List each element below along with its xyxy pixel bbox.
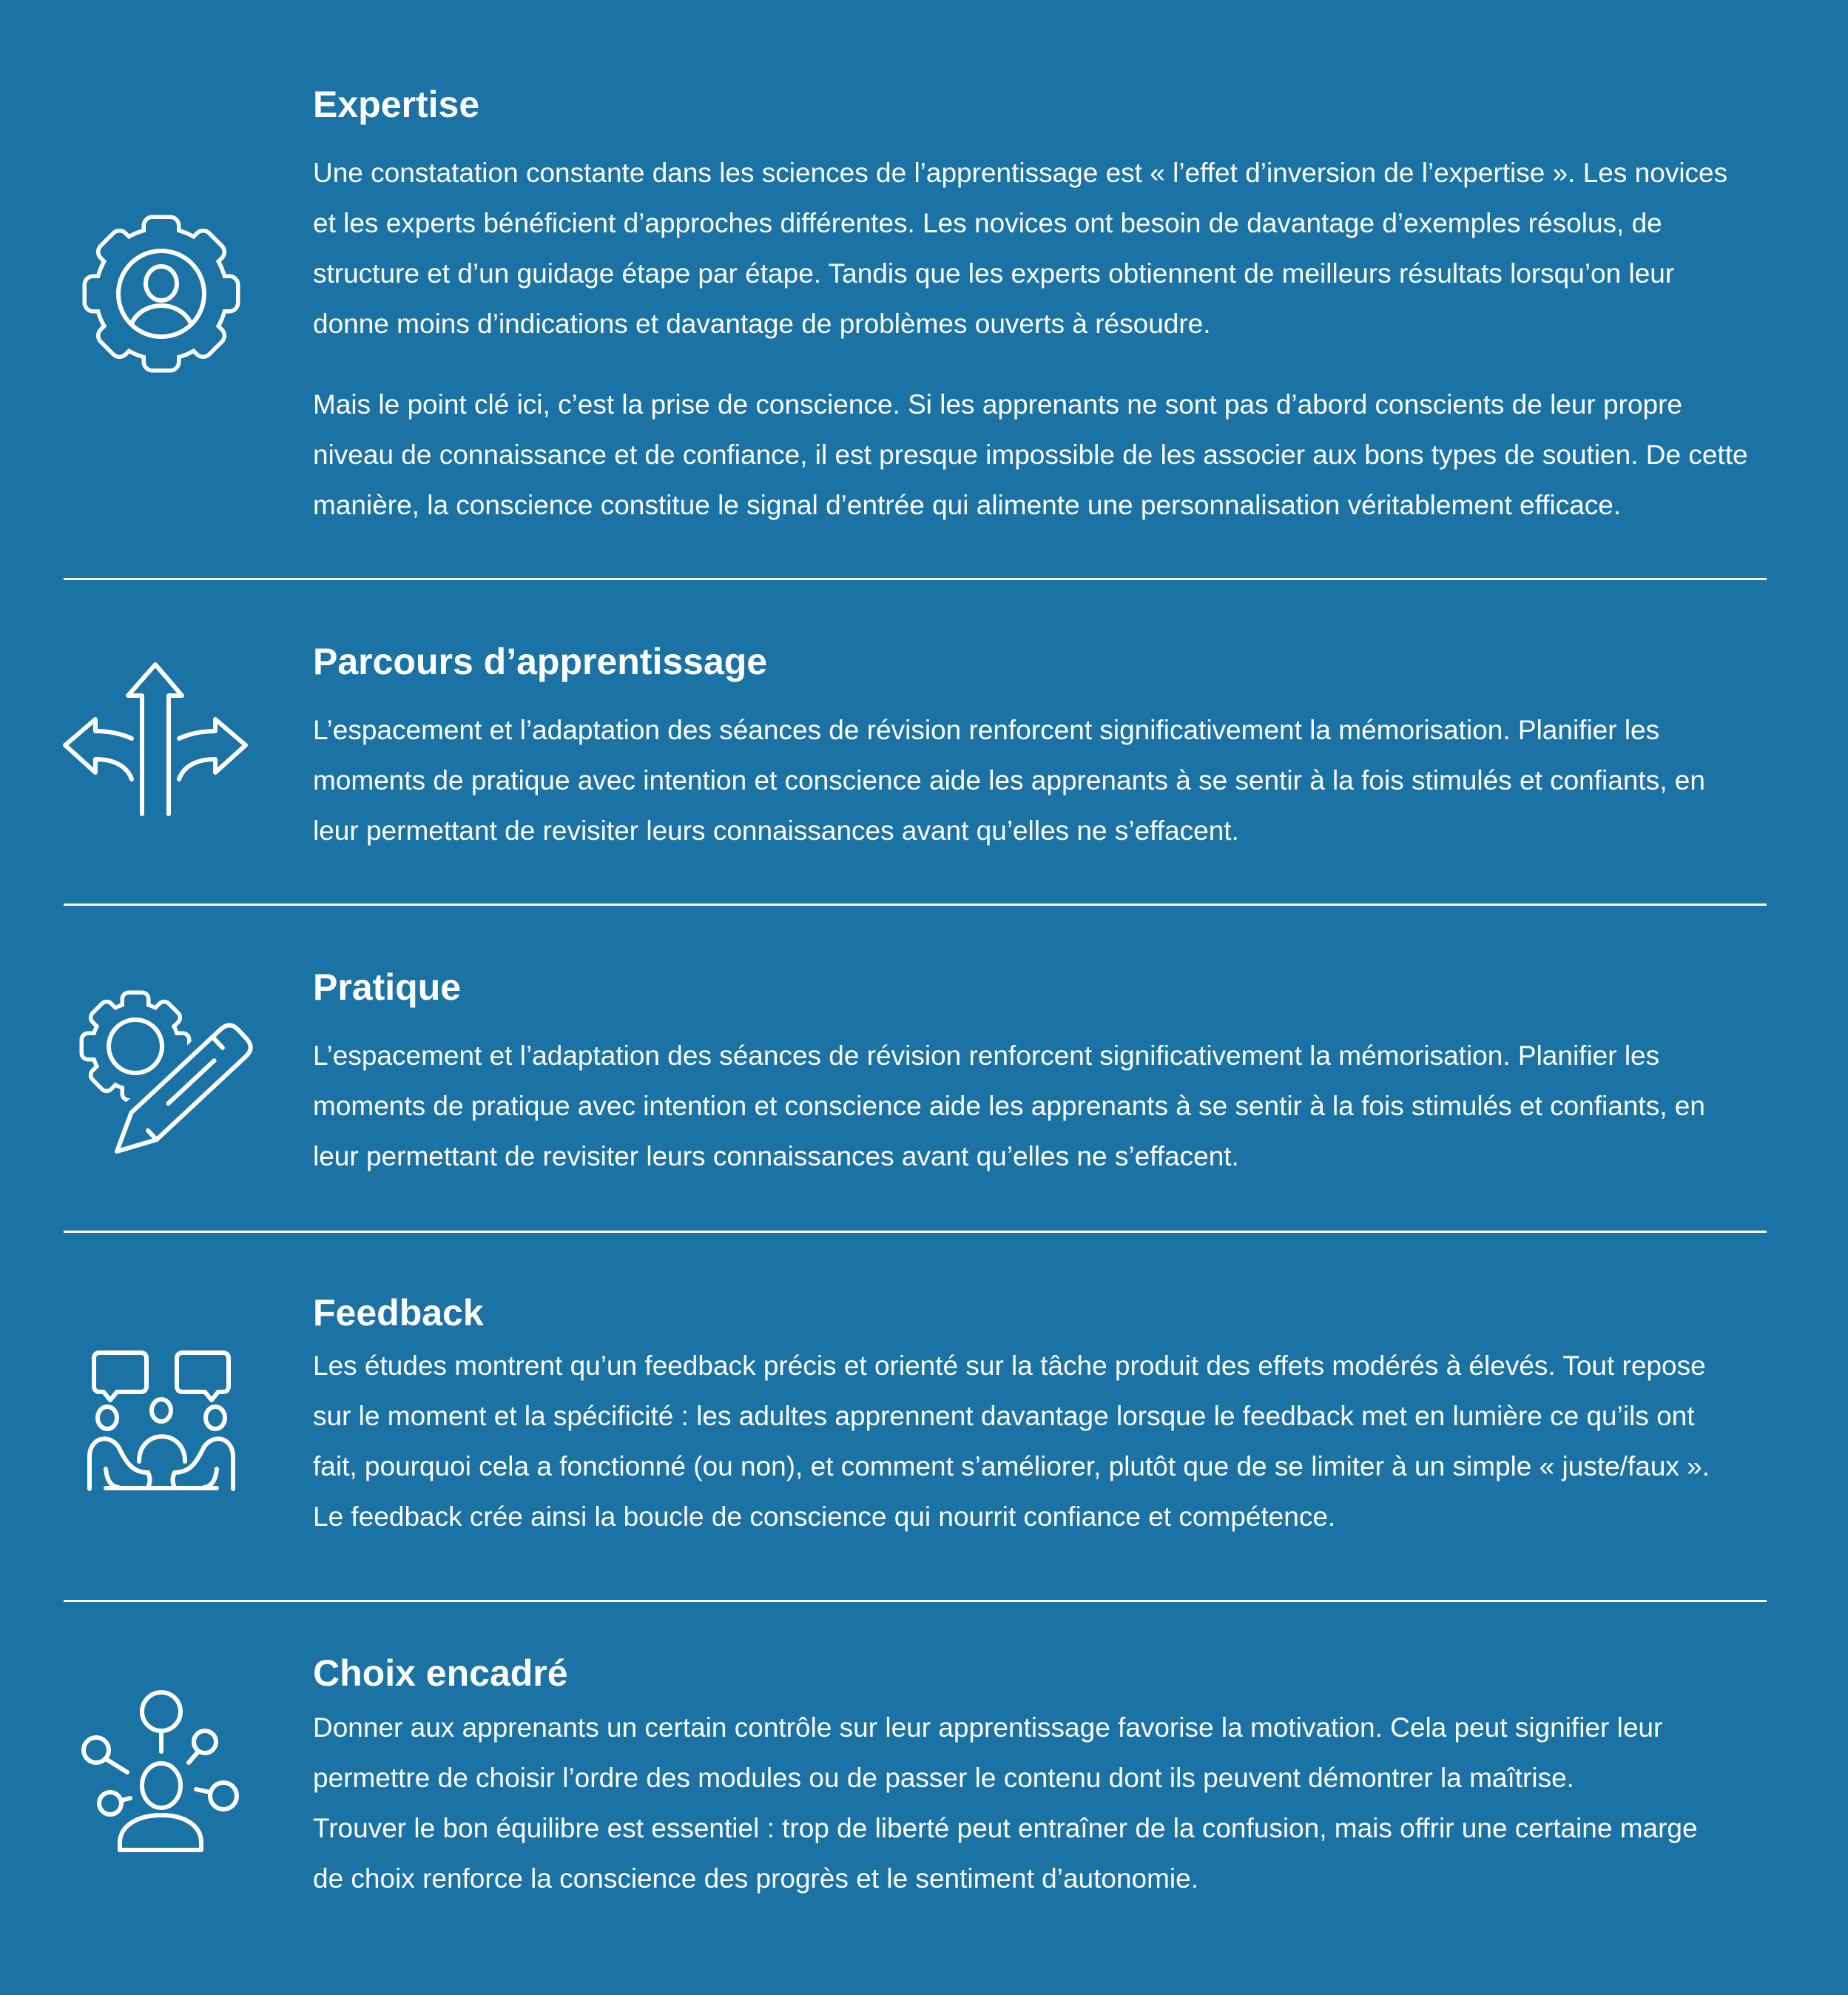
text: Expertise body: structure et d’un guidage étape par étape. Tandis que les experts obtiennent de meilleurs résultats lorsqu’on leur	[313, 258, 1674, 289]
text: Feedback body: Le feedback crée ainsi la boucle de conscience qui nourrit confiance et compétence.	[313, 1501, 1335, 1532]
title: Pratique: Pratique	[313, 966, 461, 1008]
text: Choix body: Trouver le bon équilibre est essentiel : trop de liberté peut entraîner de la confusion, mais offrir une certaine marge	[313, 1813, 1698, 1843]
text: Choix body: permettre de choisir l’ordre des modules ou de passer le contenu dont ils peuvent démontrer la maîtrise.	[313, 1763, 1574, 1793]
text: Pratique body	[313, 1040, 1705, 1171]
text: Parcours body: L’espacement et l’adaptation des séances de révision renforcent significativement la mémorisation. Planifier les	[313, 715, 1659, 745]
text: Expertise body: donne moins d’indications et davantage de problèmes ouverts à résoudre.	[313, 309, 1211, 339]
text: Parcours body: leur permettant de revisiter leurs connaissances avant qu’elles ne s’effacent.	[313, 815, 1239, 846]
title: Choix encadré: Choix encadré	[313, 1652, 568, 1694]
icon: gear with person	[87, 219, 236, 369]
text: Expertise body: et les experts bénéficient d’approches différentes. Les novices ont besoin de davantage d’exemples résolus, de	[313, 208, 1662, 238]
title: Feedback: Feedback	[313, 1292, 484, 1333]
text: Feedback body: fait, pourquoi cela a fonctionné (ou non), et comment s’améliorer, plutôt que de se limiter à un simple « juste/faux ».	[313, 1451, 1710, 1481]
title: Parcours d'apprentissage: Parcours d’apprentissage	[313, 641, 767, 682]
text: Expertise body: Mais le point clé ici, c’est la prise de conscience. Si les apprenants ne sont pas d’abord conscients de leur propre	[313, 389, 1682, 420]
text: Choix body: de choix renforce la conscience des progrès et le sentiment d’autonomie.	[313, 1863, 1198, 1894]
icon: feedback group	[90, 1353, 233, 1489]
text: Choix body	[313, 1712, 1698, 1894]
text: Pratique body: moments de pratique avec intention et conscience aide les apprenants à se sentir à la fois stimulés et confiants, en	[313, 1091, 1705, 1121]
text: Expertise body: Une constatation constante dans les sciences de l’apprentissage est « l’effet d’inversion de l’expertise ». Les novices	[313, 158, 1727, 188]
icon: guided choice	[84, 1692, 237, 1850]
icon: gear and pencil	[84, 995, 255, 1165]
text: Feedback body	[313, 1350, 1710, 1532]
text: Feedback body: sur le moment et la spécificité : les adultes apprennent davantage lorsque le feedback met en lumière ce qu’ils ont	[313, 1401, 1695, 1431]
title: Expertise: Expertise	[313, 84, 479, 125]
icon: crossroads arrows	[65, 665, 246, 814]
text: Expertise body: niveau de connaissance et de confiance, il est presque impossible de les associer aux bons types de soutien. De cette	[313, 440, 1748, 470]
text: Parcours body: moments de pratique avec intention et conscience aide les apprenants à se sentir à la fois stimulés et confiants, en	[313, 765, 1705, 795]
text: Pratique body: L’espacement et l’adaptation des séances de révision renforcent significativement la mémorisation. Planifier les	[313, 1040, 1659, 1071]
text: Feedback body: Les études montrent qu’un feedback précis et orienté sur la tâche produit des effets modérés à élevés. Tout repose	[313, 1350, 1706, 1381]
text: Parcours body	[313, 715, 1705, 846]
text: Expertise body	[313, 158, 1748, 520]
text: Choix body: Donner aux apprenants un certain contrôle sur leur apprentissage favorise la motivation. Cela peut signifier leur	[313, 1712, 1662, 1743]
text: Pratique body: leur permettant de revisiter leurs connaissances avant qu’elles ne s’effacent.	[313, 1141, 1239, 1171]
text: Expertise body: manière, la conscience constitue le signal d’entrée qui alimente une personnalisation véritablement efficace.	[313, 490, 1621, 520]
